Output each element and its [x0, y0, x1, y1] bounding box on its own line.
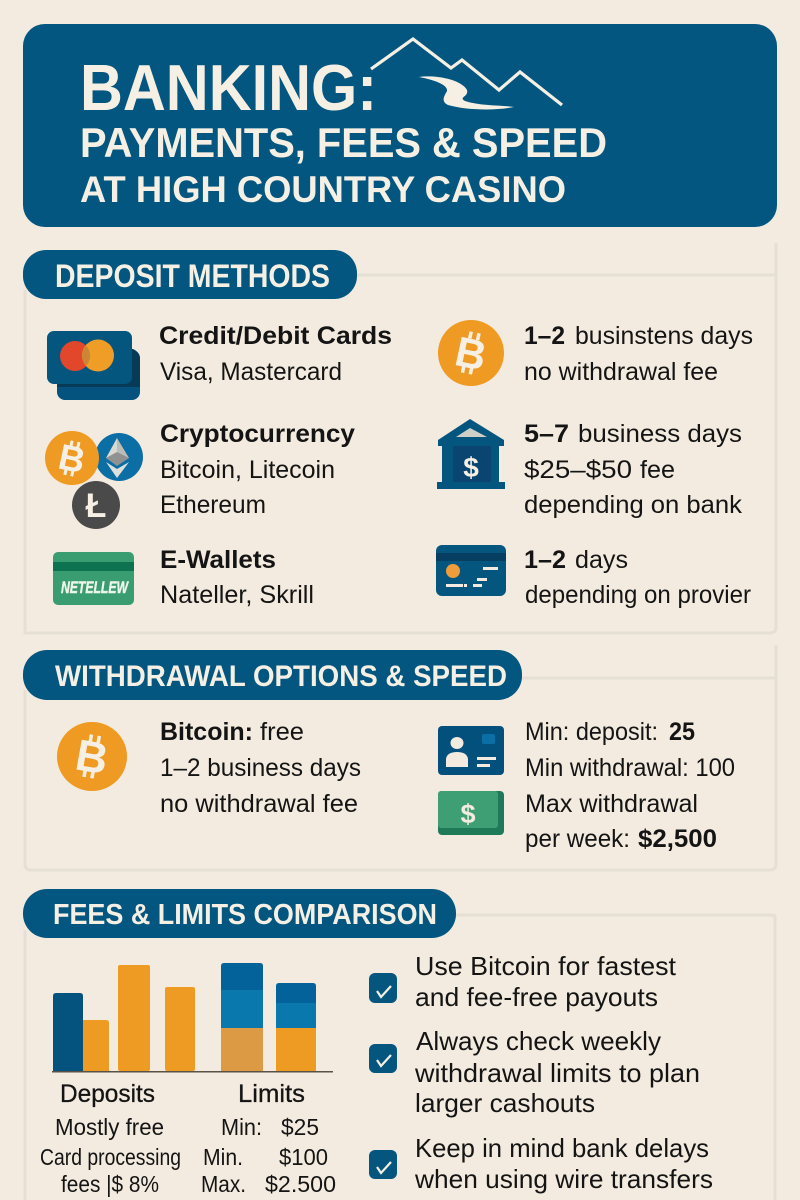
text: credit debit cards	[159, 322, 392, 386]
text: limits summary: $25	[281, 1114, 319, 1140]
title: BANKING:	[80, 51, 377, 124]
text: bitcoin withdrawal: 1–2 business days	[160, 754, 361, 782]
text: cryptocurrency: Bitcoin, Litecoin	[160, 456, 335, 484]
text: card speed: depending on provier	[525, 581, 751, 609]
text: credit debit cards: Visa, Mastercard	[160, 358, 342, 386]
tip: check weekly limits: larger cashouts	[415, 1088, 595, 1118]
text: bitcoin withdrawal: no withdrawal fee	[160, 790, 358, 818]
text: limits summary	[201, 1080, 336, 1197]
header banner	[23, 24, 777, 227]
text: deposits summary: Card processing	[40, 1144, 181, 1170]
text: e-wallets: Nateller, Skrill	[160, 581, 314, 609]
bar chart: deposits	[53, 965, 195, 1071]
bar chart: limits	[52, 963, 333, 1072]
text: bitcoin withdrawal	[160, 718, 361, 818]
text: bitcoin speed: businstens days	[575, 322, 753, 350]
text: limits	[525, 718, 735, 853]
text: cryptocurrency	[160, 420, 355, 519]
icon: mountain logo	[371, 39, 562, 109]
panel: withdrawal options and speed	[23, 645, 776, 870]
tip: use bitcoin: Use Bitcoin for fastest	[415, 951, 677, 981]
icon: cash note	[438, 791, 504, 835]
icon: crypto coins	[45, 431, 143, 529]
icon: bitcoin coin	[438, 320, 504, 386]
heading: withdrawal options	[23, 650, 522, 700]
text: limits: Min withdrawal: 100	[525, 754, 735, 782]
tip: use bitcoin: and fee-free payouts	[415, 982, 658, 1012]
heading: deposit methods: DEPOSIT METHODS	[55, 258, 330, 294]
title: PAYMENTS, FEES & SPEED	[80, 119, 607, 166]
text: e-wallets	[160, 546, 314, 609]
text: limits: 25	[669, 718, 695, 746]
icon: bitcoin coin	[57, 722, 127, 791]
text: limits summary: Min:	[221, 1114, 262, 1140]
text: limits: Max withdrawal	[525, 790, 698, 818]
icon: bitcoin coin: B	[451, 327, 491, 380]
text: limits: $2,500	[638, 825, 717, 853]
text: e-wallets: E-Wallets	[160, 546, 276, 574]
tip: check weekly limits: Always check weekly	[416, 1026, 661, 1056]
text: limits summary: Max.	[201, 1171, 246, 1197]
text: bank speed: fee	[640, 456, 675, 484]
panel: deposit methods	[23, 243, 776, 633]
icon: cash note: $	[460, 799, 476, 829]
text: bitcoin speed: 1–2	[524, 322, 565, 350]
icon: bitcoin coin: B	[72, 731, 112, 784]
text: bitcoin speed	[524, 322, 753, 386]
title: AT HIGH COUNTRY CASINO	[80, 169, 566, 210]
text: limits: Min: deposit:	[525, 718, 658, 746]
text: deposits summary: Deposits	[60, 1080, 155, 1108]
icon: id card	[438, 726, 504, 775]
text: limits summary: $100	[279, 1144, 328, 1170]
icon: e-wallet card	[53, 552, 134, 605]
text: deposits summary: fees |$ 8%	[61, 1171, 159, 1197]
icon: crypto coins: B	[55, 436, 89, 481]
text: bank speed: $25–$50	[524, 456, 632, 484]
heading: fees and limits: FEES & LIMITS COMPARISON	[53, 899, 437, 931]
text: card speed: 1–2	[524, 546, 566, 574]
text: card speed	[524, 546, 751, 609]
text: deposits summary	[40, 1080, 181, 1197]
title	[80, 51, 607, 210]
heading: fees and limits	[23, 889, 456, 938]
text: bank speed: depending on bank	[524, 491, 743, 519]
tip: bank delays: Keep in mind bank delays	[415, 1133, 709, 1163]
heading: deposit methods	[23, 250, 357, 299]
heading: withdrawal options: WITHDRAWAL OPTIONS & SPEED	[55, 660, 507, 693]
tip: bank delays	[369, 1133, 713, 1194]
text: deposits summary: Mostly free	[55, 1114, 164, 1140]
text: bitcoin speed: no withdrawal fee	[524, 358, 718, 386]
text: bank speed: business days	[578, 420, 742, 448]
text: card speed: days	[575, 546, 628, 574]
icon: crypto coins: Ł	[86, 487, 106, 525]
tip: use bitcoin	[369, 951, 677, 1012]
text: limits: per week:	[525, 825, 630, 853]
text: cryptocurrency: Cryptocurrency	[160, 420, 355, 448]
text: cryptocurrency: Ethereum	[160, 491, 266, 519]
text: limits summary: Limits	[238, 1080, 305, 1108]
text: limits summary: Min.	[203, 1144, 243, 1170]
icon: e-wallet card: NETELLEW	[61, 578, 129, 597]
text: limits summary: $2.500	[265, 1171, 336, 1197]
text: bitcoin withdrawal: Bitcoin:	[160, 718, 253, 746]
icon: bank: $	[463, 452, 479, 483]
icon: payment card	[436, 545, 506, 596]
text: bank speed: 5–7	[524, 420, 569, 448]
tip: check weekly limits: withdrawal limits to plan	[414, 1058, 700, 1088]
icon: bank	[437, 419, 505, 489]
panel: fees and limits comparison	[23, 889, 775, 1200]
text: bank speed	[524, 420, 743, 519]
icon: credit cards	[47, 331, 140, 400]
text: credit debit cards: Credit/Debit Cards	[159, 322, 392, 350]
text: bitcoin withdrawal: free	[260, 718, 304, 746]
tip: bank delays: when using wire transfers	[414, 1164, 713, 1194]
tip: check weekly limits	[369, 1026, 700, 1118]
